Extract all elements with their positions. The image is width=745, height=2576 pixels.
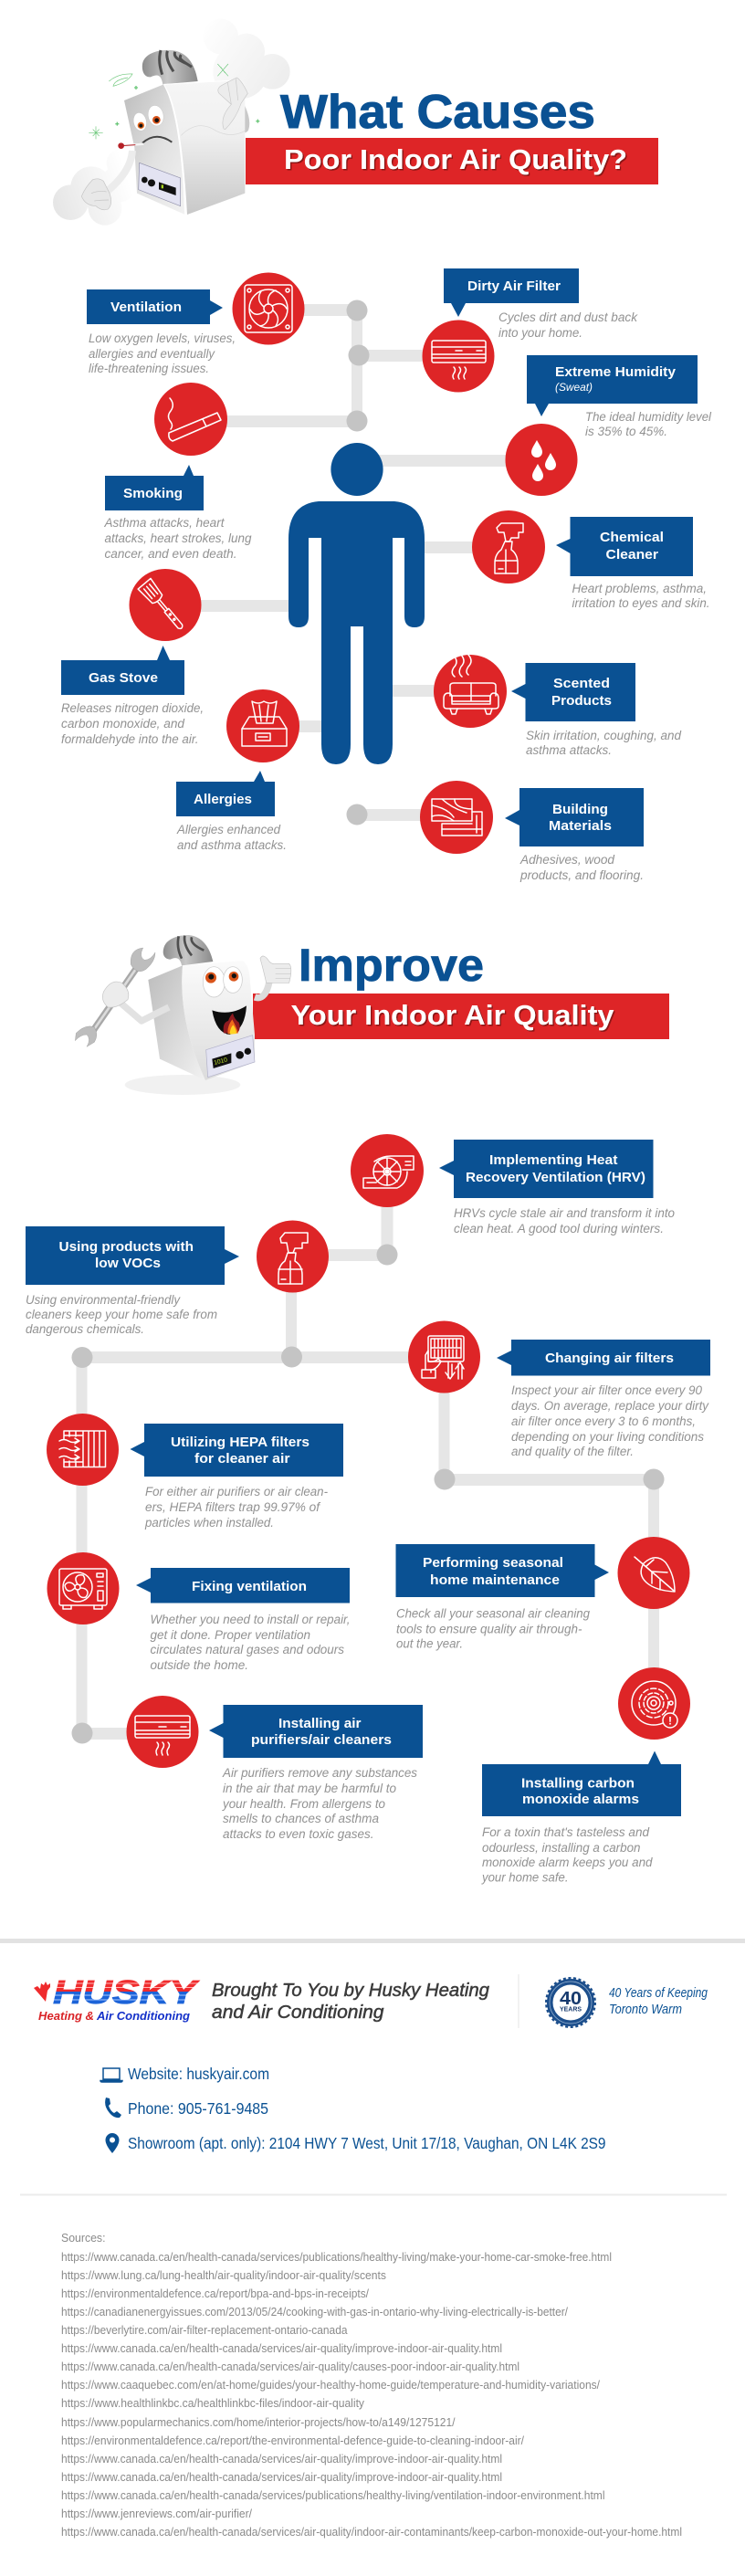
description: Inspect your air filter once every 90	[511, 1383, 702, 1397]
label	[497, 1340, 710, 1375]
panel: allergies	[176, 689, 299, 852]
logo: Husky	[34, 1973, 200, 2023]
label	[527, 355, 698, 416]
mouth	[142, 137, 172, 143]
panel: heat recovery ventilation: Recovery Ventilation (HRV)	[466, 1170, 645, 1185]
description: attacks to even toxic gases.	[223, 1827, 374, 1841]
smoke clouds	[53, 19, 290, 226]
panel: changing air filters: Changing air filters	[545, 1351, 674, 1366]
panel: scented products	[434, 655, 681, 757]
description: your health. From allergens to	[222, 1797, 385, 1811]
title line two: Poor Indoor Air Quality?	[284, 143, 627, 175]
red title banner	[246, 138, 658, 184]
description: attacks, heart strokes, lung	[104, 531, 252, 545]
label	[87, 289, 223, 324]
panel: sources: https://www.canada.ca/en/health-canada/services/air-quality/improve-indoor-air-quality.html	[61, 2341, 502, 2355]
icon: spatula	[130, 569, 201, 641]
panel: sources: https://beverlytire.com/air-filter-replacement-ontario-canada	[61, 2323, 348, 2337]
panel: scented products: Scented	[553, 676, 610, 691]
description: Whether you need to install or repair,	[150, 1613, 351, 1626]
description	[150, 1613, 351, 1672]
icon: CO alarm: !	[668, 1715, 672, 1728]
showroom address: Showroom (apt. only): 2104 HWY 7 West, Unit 17/18, Vaughan, ON L4K 2S9	[128, 2134, 606, 2152]
panel: sources: https://www.lung.ca/lung-health/air-quality/indoor-air-quality/scents	[61, 2268, 386, 2282]
panel: sources: https://www.canada.ca/en/health-canada/services/air-quality/improve-indoor-air-quality.html	[61, 2452, 502, 2466]
icon: tissue box	[226, 689, 299, 762]
panel: smoking	[103, 383, 252, 561]
description: carbon monoxide, and	[61, 717, 184, 731]
icon: blower wheel	[351, 1134, 424, 1207]
panel: HEPA filters: for cleaner air	[194, 1451, 290, 1467]
panel: chemical cleaner	[472, 510, 710, 610]
label	[482, 1751, 681, 1816]
eyes	[131, 104, 165, 132]
description: Using environmental-friendly	[26, 1293, 181, 1307]
icon: flooring rolls	[420, 781, 493, 854]
panel: seasonal maintenance: Performing seasonal	[423, 1555, 563, 1571]
panel: sources: https://www.caaquebec.com/en/at-home/guides/your-healthy-home-guide/temperature-and-humidity-variations/	[61, 2378, 600, 2392]
description	[585, 410, 712, 438]
panel: low VOC products: low VOCs	[95, 1256, 161, 1271]
panel: air purifiers: Installing air	[278, 1716, 362, 1731]
panel: air purifiers	[126, 1696, 423, 1841]
icon: laptop	[100, 2068, 122, 2082]
red title banner	[253, 994, 669, 1039]
heading: improve	[253, 940, 669, 1039]
panel: carbon monoxide alarms: Installing carbon	[521, 1775, 635, 1792]
illustration: sick furnace mascot	[53, 19, 290, 226]
panel: building materials: Building	[552, 802, 608, 817]
description: asthma attacks.	[526, 743, 612, 757]
body	[289, 501, 425, 764]
head	[331, 443, 383, 496]
panel: seasonal maintenance	[396, 1537, 690, 1651]
left arm and hand	[81, 151, 132, 210]
description: is 35% to 45%.	[585, 425, 667, 438]
panel: seasonal maintenance: home maintenance	[430, 1572, 560, 1588]
badge: 40 years	[546, 1978, 595, 2027]
description: your home safe.	[481, 1870, 568, 1885]
description	[61, 701, 204, 746]
sponsor statement: and Air Conditioning	[212, 2003, 383, 2023]
panel: sources: https://www.canada.ca/en/health-canada/services/air-quality/indoor-air-contaminants/keep-carbon-monoxide-out-your-home.html	[61, 2525, 682, 2539]
description: into your home.	[498, 326, 582, 340]
mouth with flame	[212, 1005, 247, 1035]
panel: sources: https://canadianenergyissues.com/2013/05/24/cooking-with-gas-in-ontario-why-living-electrically-is-better/	[61, 2305, 568, 2318]
description	[481, 1825, 653, 1885]
icon: water drops	[506, 424, 577, 496]
label	[439, 1140, 654, 1198]
description: Adhesives, wood	[519, 853, 614, 867]
description	[89, 331, 236, 375]
description: allergies and eventually	[89, 347, 215, 361]
title line two: Your Indoor Air Quality	[290, 999, 614, 1031]
right arm	[212, 105, 246, 144]
description	[498, 310, 638, 340]
description	[454, 1206, 675, 1235]
panel: changing air filters	[408, 1320, 710, 1458]
title line one: What Causes	[280, 86, 595, 139]
panel: extreme humidity: Extreme Humidity	[555, 364, 677, 380]
badge: 40 years: 40	[560, 1989, 582, 2009]
description	[176, 823, 287, 852]
panel: sources: https://www.canada.ca/en/health-canada/services/publications/healthy-living/ventilation-indoor-environment.html	[61, 2488, 605, 2502]
description: air filter once every 3 to 6 months,	[511, 1414, 696, 1428]
badge: 40 years: YEARS	[560, 2007, 582, 2013]
label	[61, 646, 184, 695]
panel: building materials: Materials	[549, 818, 612, 834]
panel: sponsor footer	[34, 1973, 708, 2028]
description: Skin irritation, coughing, and	[526, 729, 681, 742]
icon: spray bottle	[257, 1220, 329, 1293]
panel: gas stove	[61, 569, 204, 746]
chimney	[142, 50, 198, 84]
control panel: 1010	[214, 1057, 228, 1067]
panel: low VOC products	[26, 1220, 329, 1336]
description: tools to ensure quality air through-	[396, 1622, 582, 1636]
sponsor statement: Brought To You by Husky Heating	[212, 1981, 489, 2001]
description	[519, 853, 644, 882]
icon: wall air conditioner	[126, 1696, 199, 1768]
label	[556, 517, 693, 576]
panel: smoking: Smoking	[123, 486, 183, 501]
description: monoxide alarm keeps you and	[482, 1856, 653, 1869]
description: and asthma attacks.	[177, 838, 287, 852]
label	[130, 1424, 343, 1477]
icon: phone handset	[105, 2098, 121, 2118]
panel: fixing ventilation	[47, 1552, 351, 1672]
panel: chemical cleaner: Chemical	[600, 530, 664, 545]
description: and quality of the filter.	[511, 1445, 634, 1458]
description: Low oxygen levels, viruses,	[89, 331, 236, 345]
label	[136, 1568, 350, 1603]
illustration: happy furnace mascot	[75, 935, 291, 1095]
description: Asthma attacks, heart	[103, 516, 226, 530]
description: days. On average, replace your dirty	[511, 1399, 709, 1413]
panel: extreme humidity	[506, 355, 712, 496]
control panel	[139, 163, 181, 206]
description: odourless, installing a carbon	[482, 1841, 641, 1855]
description	[572, 582, 710, 610]
phone: Phone: 905-761-9485	[128, 2099, 268, 2118]
icon: leaf	[617, 1537, 690, 1609]
description	[526, 729, 681, 757]
title line one: Improve	[299, 940, 484, 991]
panel: improve connector lines	[71, 1205, 665, 1744]
panel: carbon monoxide alarms: monoxide alarms	[522, 1792, 639, 1807]
ground shadow	[125, 1075, 240, 1095]
icon: CO alarm	[618, 1667, 690, 1740]
panel: chemical cleaner: Cleaner	[606, 547, 658, 563]
label	[444, 268, 579, 317]
label	[396, 1544, 609, 1597]
control panel	[206, 1036, 255, 1078]
heading: what causes	[246, 86, 658, 184]
panel: HEPA filters	[47, 1414, 343, 1530]
panel: allergies: Allergies	[194, 792, 252, 807]
description: cancer, and even death.	[104, 547, 237, 561]
panel: gas stove: Gas Stove	[89, 670, 158, 686]
description: formaldehyde into the air.	[61, 732, 199, 746]
panel: scented products: Products	[551, 693, 612, 709]
icon: outdoor fan unit	[47, 1552, 119, 1624]
description: outside the home.	[150, 1658, 248, 1672]
panel: carbon monoxide alarms	[481, 1667, 690, 1885]
description: particles when installed.	[144, 1516, 274, 1530]
label	[505, 788, 644, 846]
tagline	[609, 1985, 708, 2017]
description: life-threatening issues.	[89, 362, 209, 375]
description: Heart problems, asthma,	[572, 582, 707, 595]
description	[396, 1607, 590, 1651]
description: Releases nitrogen dioxide,	[61, 701, 204, 715]
logo: Husky: HUSKY	[53, 1973, 200, 2011]
description: ers, HEPA filters trap 99.97% of	[145, 1500, 320, 1514]
chimney	[163, 935, 213, 965]
description: depending on your living conditions	[511, 1430, 704, 1444]
panel: ventilation: Ventilation	[110, 300, 182, 315]
eyes	[203, 967, 242, 997]
icon: fan	[232, 272, 305, 345]
icon: spray bottle	[472, 510, 545, 584]
label	[26, 1226, 239, 1285]
tagline: 40 Years of Keeping	[609, 1985, 708, 2001]
website: Website: huskyair.com	[128, 2065, 269, 2083]
furnace body	[148, 965, 205, 1080]
icon: sofa with vapours	[434, 655, 507, 728]
description: Check all your seasonal air cleaning	[396, 1607, 590, 1620]
panel: low VOC products: Using products with	[58, 1239, 194, 1255]
panel: air purifiers: purifiers/air cleaners	[251, 1732, 392, 1748]
logo: Husky: Heating &	[38, 2009, 94, 2023]
panel: ventilation	[87, 272, 305, 375]
description: get it done. Proper ventilation	[150, 1628, 310, 1642]
panel: sources: https://environmentaldefence.ca/report/bpa-and-bps-in-receipts/	[61, 2287, 369, 2300]
thermometer	[118, 142, 143, 149]
icon: cigarette	[154, 383, 227, 456]
description: irritation to eyes and skin.	[572, 596, 710, 610]
description	[511, 1383, 709, 1458]
panel: contact details	[100, 2065, 606, 2153]
panel: dirty air filter: Dirty Air Filter	[467, 279, 561, 294]
description: products, and flooring.	[519, 868, 644, 882]
description	[26, 1293, 217, 1336]
panel: sources: https://www.jenreviews.com/air-purifier/	[61, 2507, 252, 2520]
description: dangerous chemicals.	[26, 1322, 144, 1336]
panel: fixing ventilation: Fixing ventilation	[192, 1579, 307, 1594]
icon: wall air conditioner	[422, 320, 495, 393]
panel: sources: https://www.canada.ca/en/health-canada/services/publications/healthy-living/make-your-home-car-smoke-free.html	[61, 2250, 612, 2264]
wrench and arm	[75, 948, 169, 1046]
panel: sources: Sources:	[61, 2231, 106, 2245]
panel: sources: https://environmentaldefence.ca/report/the-environmental-defence-guide-to-cleaning-indoor-air/	[61, 2434, 524, 2447]
tagline: Toronto Warm	[609, 2002, 682, 2017]
panel: heat recovery ventilation: Implementing Heat	[489, 1152, 618, 1168]
panel: extreme humidity: (Sweat)	[555, 381, 593, 394]
panel: heat recovery ventilation	[351, 1134, 675, 1235]
description: For a toxin that's tasteless and	[482, 1825, 649, 1839]
icon: map pin	[106, 2133, 119, 2153]
description: For either air purifiers or air clean-	[145, 1485, 328, 1498]
description: Air purifiers remove any substances	[222, 1766, 417, 1780]
human figure	[289, 443, 425, 764]
sponsor statement	[212, 1981, 489, 2023]
logo: Husky: Air Conditioning	[96, 2009, 190, 2023]
label	[105, 465, 204, 510]
description	[103, 516, 252, 561]
description: clean heat. A good tool during winters.	[454, 1222, 664, 1235]
description: The ideal humidity level	[585, 410, 712, 424]
panel: causes connector lines	[196, 300, 511, 825]
label	[511, 663, 635, 721]
description: Cycles dirt and dust back	[498, 310, 638, 324]
hand raised	[218, 78, 247, 130]
panel: HEPA filters: Utilizing HEPA filters	[171, 1435, 310, 1450]
description	[144, 1485, 328, 1530]
icon: hand holding filter	[408, 1320, 480, 1393]
green sparkles	[89, 64, 259, 139]
description: smells to chances of asthma	[223, 1812, 379, 1825]
panel: sources: https://www.canada.ca/en/health-canada/services/air-quality/improve-indoor-air-quality.html	[61, 2470, 502, 2484]
panel: sources: https://www.canada.ca/en/health-canada/services/air-quality/causes-poor-indoor-air-quality.html	[61, 2360, 519, 2373]
panel: dirty air filter	[422, 268, 638, 393]
thumbs up arm	[255, 956, 291, 998]
panel: building materials	[420, 781, 644, 882]
description: circulates natural gases and odours	[150, 1643, 344, 1656]
icon: maple leaf	[34, 1982, 50, 2002]
label	[176, 771, 275, 816]
panel: sources	[61, 2231, 682, 2539]
panel: sources: https://www.healthlinkbc.ca/healthlinkbc-files/indoor-air-quality	[61, 2396, 364, 2410]
description	[222, 1766, 417, 1841]
description: in the air that may be harmful to	[223, 1782, 396, 1795]
description: out the year.	[396, 1636, 463, 1651]
label	[209, 1705, 423, 1758]
icon: HEPA filter	[47, 1414, 119, 1486]
furnace body	[163, 80, 245, 215]
description: Allergies enhanced	[176, 823, 280, 836]
description: HRVs cycle stale air and transform it into	[454, 1206, 675, 1220]
description: cleaners keep your home safe from	[26, 1308, 217, 1321]
panel: sources: https://www.popularmechanics.com/home/interior-projects/how-to/a149/1275121/	[61, 2415, 456, 2429]
